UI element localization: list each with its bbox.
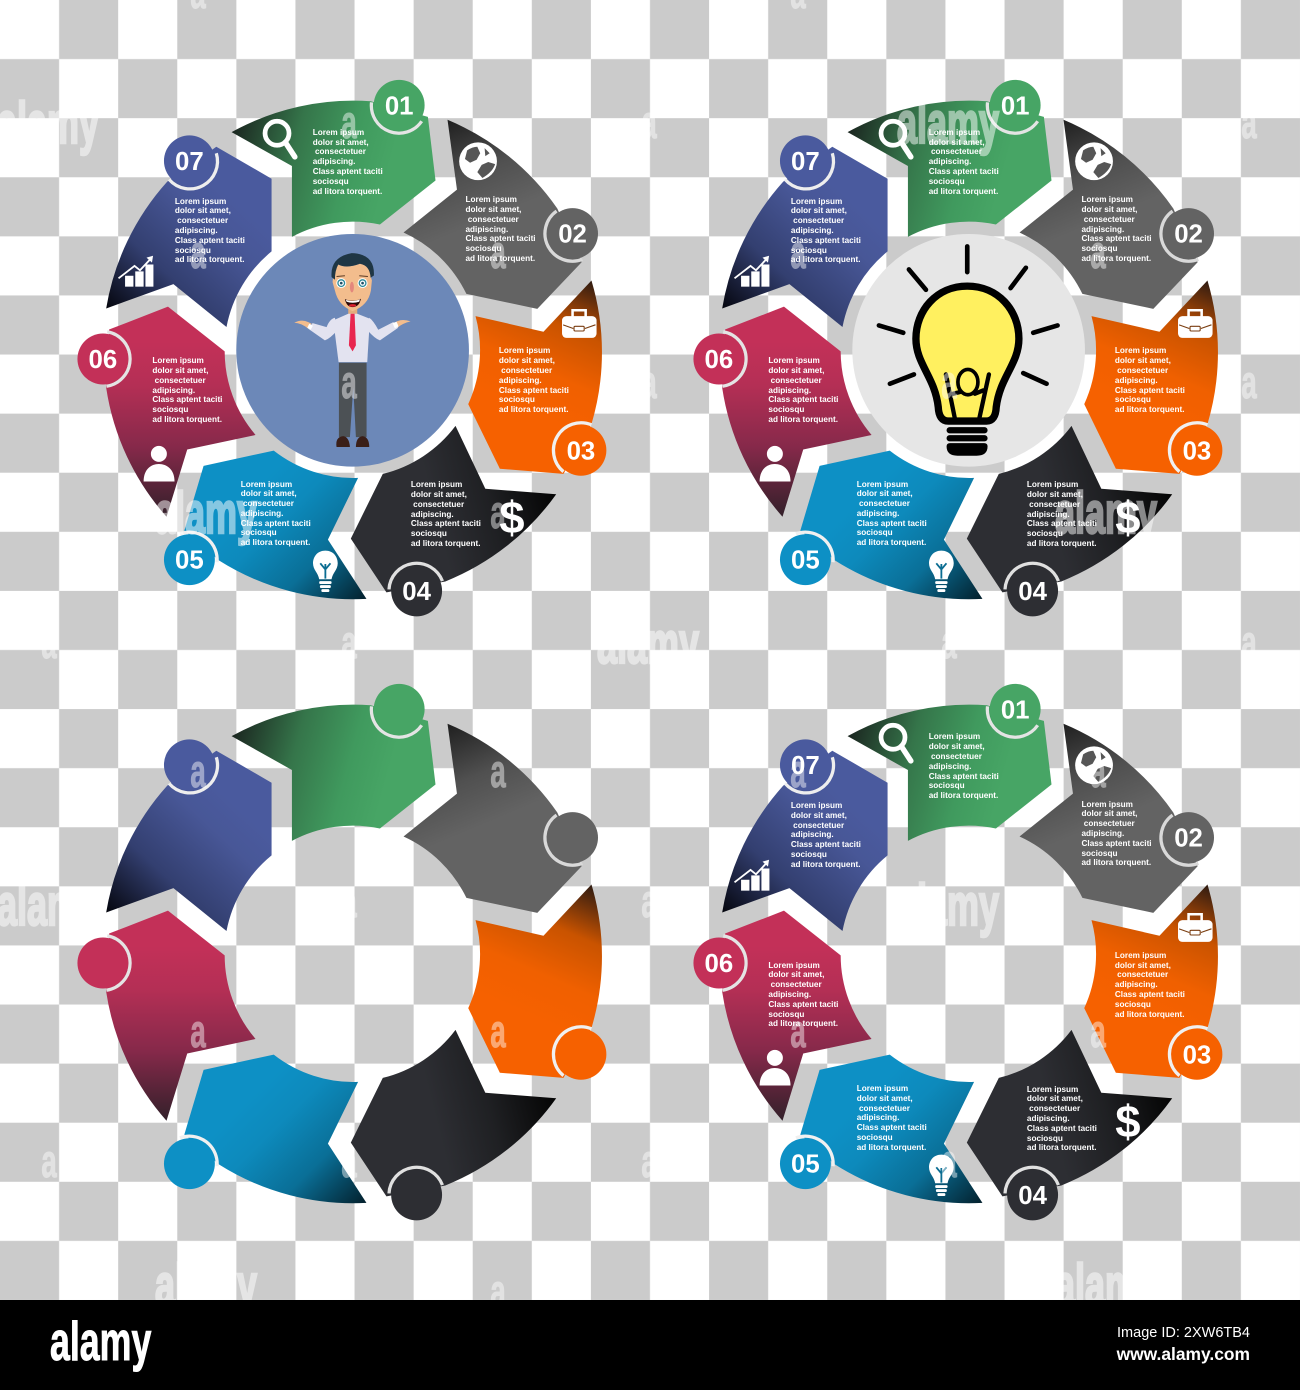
blank segment green (232, 684, 436, 841)
text block 05: sociosqu (241, 528, 277, 537)
text block 01: dolor sit amet, (313, 138, 369, 147)
text block 06: Lorem ipsum (768, 356, 820, 365)
text block 06: Class aptent taciti (152, 395, 222, 404)
text block 05: adipiscing. (857, 1113, 899, 1122)
segment 05 blue: 05 (175, 546, 204, 574)
segment 03 orange: 03 (1183, 437, 1211, 465)
text block 03: adipiscing. (499, 376, 542, 385)
watermark overlay: alamy (0, 91, 99, 156)
blank ring diagram (77, 684, 606, 1220)
segment 07 navy: 07 (791, 752, 820, 780)
text block 05: adipiscing. (857, 509, 899, 518)
segment 01 green (232, 79, 436, 236)
text block 03: dolor sit amet, (1115, 961, 1171, 970)
text block 02 (1082, 195, 1152, 263)
text block 07: Class aptent taciti (175, 236, 245, 245)
text block 06: sociosqu (768, 405, 804, 414)
text block 02: sociosqu (466, 244, 501, 253)
segment 03 orange (468, 280, 606, 475)
text block 02: Lorem ipsum (1082, 195, 1133, 204)
blank segment black (351, 1030, 556, 1220)
text block 01: Lorem ipsum (929, 128, 980, 137)
segment 03 orange (1084, 280, 1222, 475)
text block 07: ad litora torquent. (791, 255, 860, 264)
text block 06 (768, 961, 838, 1028)
text block 07: Lorem ipsum (791, 197, 842, 206)
segment 02 grey (1020, 724, 1214, 913)
text block 04 (411, 480, 481, 548)
text block 06: dolor sit amet, (152, 366, 208, 375)
text block 03: Lorem ipsum (1115, 346, 1166, 355)
watermark overlay: a (790, 228, 806, 279)
watermark overlay: a (1090, 1007, 1106, 1058)
text block 05: consectetuer (859, 1104, 910, 1113)
text block 03: sociosqu (1115, 1000, 1151, 1009)
text block 05: Class aptent taciti (857, 1123, 927, 1132)
text block 06: consectetuer (155, 376, 206, 385)
segment 05 blue: 05 (791, 1151, 820, 1179)
text block 01: Lorem ipsum (929, 732, 980, 741)
panel: blank cycle without text (77, 684, 606, 1220)
segment 02 grey: 02 (1174, 220, 1203, 248)
text block 02: adipiscing. (466, 225, 508, 234)
text block 07: Lorem ipsum (175, 197, 226, 206)
text block 06: ad litora torquent. (152, 415, 222, 424)
text block 02: ad litora torquent. (1082, 858, 1151, 867)
segment 07 navy (106, 135, 272, 327)
text block 04: sociosqu (1027, 529, 1063, 538)
blank segment grey (404, 724, 598, 913)
text block 07: consectetuer (793, 216, 844, 225)
watermark overlay: a (941, 618, 957, 669)
text block 03: consectetuer (1117, 366, 1168, 375)
watermark overlay: a (341, 877, 357, 928)
watermark overlay: a (341, 358, 357, 409)
segment 01 green (848, 684, 1052, 841)
text block 03 (1115, 346, 1185, 414)
watermark overlay: a (41, 358, 57, 409)
watermark overlay: alamy (0, 873, 99, 938)
text block 06: adipiscing. (768, 386, 811, 395)
text block 04: consectetuer (1029, 500, 1080, 509)
segment 06 crimson: 06 (705, 950, 733, 978)
text block 04: Class aptent taciti (411, 519, 481, 528)
text block 01: dolor sit amet, (929, 742, 985, 751)
text block 04: ad litora torquent. (1027, 539, 1096, 548)
watermark overlay: alamy (155, 481, 257, 546)
text block 05: dolor sit amet, (857, 489, 913, 498)
text block 06: Lorem ipsum (768, 961, 820, 970)
text block 07: consectetuer (793, 821, 844, 830)
text block 06 (152, 356, 222, 424)
watermark overlay: a (1241, 98, 1257, 149)
text block 05: Class aptent taciti (241, 519, 311, 528)
watermark overlay: a (490, 747, 506, 798)
text block 07: sociosqu (791, 850, 827, 859)
text block 04: consectetuer (1029, 1104, 1080, 1113)
text block 06: sociosqu (152, 405, 188, 414)
text block 04 (1027, 1085, 1097, 1152)
text block 03: ad litora torquent. (1115, 1010, 1184, 1019)
text block 04: adipiscing. (1027, 510, 1070, 519)
text block 02: consectetuer (1084, 819, 1135, 828)
segment 02 grey (404, 119, 598, 308)
text block 05: ad litora torquent. (241, 538, 310, 547)
text block 02: consectetuer (468, 215, 519, 224)
text block 04: adipiscing. (411, 510, 454, 519)
segment 01 green: 01 (1001, 92, 1030, 120)
watermark overlay: a (490, 488, 506, 539)
text block 07: ad litora torquent. (791, 860, 860, 869)
segment 05 blue (164, 450, 366, 599)
segment 03 orange: 03 (567, 437, 595, 465)
text block 03: ad litora torquent. (1115, 405, 1184, 414)
text block 02: Lorem ipsum (466, 195, 517, 204)
text block 02: ad litora torquent. (1082, 254, 1151, 263)
text block 05: sociosqu (857, 528, 893, 537)
text block 07: dolor sit amet, (791, 206, 847, 215)
text block 07 (791, 197, 861, 264)
ring diagram with empty centre (693, 684, 1222, 1220)
text block 06 (768, 356, 838, 424)
segment 06 crimson: 06 (705, 346, 733, 374)
text block 07: adipiscing. (791, 830, 834, 839)
segment 07 navy: 07 (791, 147, 820, 175)
text block 05: dolor sit amet, (857, 1094, 913, 1103)
text block 03: Class aptent taciti (1115, 990, 1185, 999)
watermark overlay: alamy (897, 873, 999, 938)
text block 07: Lorem ipsum (791, 801, 842, 810)
watermark overlay: a (1241, 877, 1257, 928)
text block 03: ad litora torquent. (499, 405, 568, 414)
text block 01: consectetuer (315, 147, 366, 156)
text block 01 (929, 732, 999, 800)
ring diagram with character (77, 80, 606, 616)
text block 02: sociosqu (1082, 849, 1117, 858)
text block 01: ad litora torquent. (929, 187, 998, 196)
text block 06: sociosqu (768, 1010, 804, 1019)
text block 03: sociosqu (499, 395, 535, 404)
text block 07: adipiscing. (175, 226, 218, 235)
text block 04: ad litora torquent. (1027, 1143, 1096, 1152)
text block 01: consectetuer (931, 752, 982, 761)
text block 03: dolor sit amet, (499, 356, 555, 365)
watermark overlay: a (190, 1007, 206, 1058)
segment 05 blue (780, 450, 982, 599)
text block 06: Class aptent taciti (768, 1000, 838, 1009)
text block 03: adipiscing. (1115, 376, 1158, 385)
watermark overlay: a (1241, 358, 1257, 409)
text block 02: dolor sit amet, (466, 205, 521, 214)
text block 01: Lorem ipsum (313, 128, 364, 137)
text block 06: Class aptent taciti (768, 395, 838, 404)
segment 06 crimson (693, 306, 872, 516)
text block 04: Lorem ipsum (411, 480, 462, 489)
text block 03: Class aptent taciti (1115, 386, 1185, 395)
text block 05: ad litora torquent. (857, 538, 926, 547)
text block 05: consectetuer (243, 499, 294, 508)
text block 05: adipiscing. (241, 509, 283, 518)
text block 01: adipiscing. (929, 157, 971, 166)
segment 02 grey: 02 (558, 220, 587, 248)
text block 04: Class aptent taciti (1027, 1124, 1097, 1133)
watermark overlay: a (490, 1007, 506, 1058)
text block 06: ad litora torquent. (768, 415, 838, 424)
segment 04 black (351, 425, 556, 616)
footer bar (0, 1300, 1300, 1390)
watermark overlay: a (190, 228, 206, 279)
text block 06: consectetuer (771, 376, 822, 385)
text block 06: dolor sit amet, (768, 366, 824, 375)
watermark overlay: a (641, 877, 657, 928)
segment 03 orange: 03 (1183, 1041, 1211, 1069)
watermark overlay: a (341, 618, 357, 669)
text block 04: Class aptent taciti (1027, 519, 1097, 528)
text block 04: dolor sit amet, (411, 490, 467, 499)
text block 07: Class aptent taciti (791, 236, 861, 245)
segment 02 grey: 02 (1174, 825, 1203, 853)
text block 01: adipiscing. (929, 762, 971, 771)
text block 01 (929, 128, 999, 196)
watermark overlay: a (41, 1137, 57, 1188)
panel: cycle with businessman centre (77, 80, 606, 616)
watermark overlay: a (190, 747, 206, 798)
blank segment blue (164, 1055, 366, 1203)
segment 01 green (848, 79, 1052, 236)
watermark overlay: a (490, 228, 506, 279)
segment 06 crimson (693, 911, 872, 1121)
blank segment navy (106, 739, 272, 931)
blank segment crimson (77, 911, 256, 1121)
text block 02: Class aptent taciti (466, 234, 536, 243)
watermark overlay: a (790, 747, 806, 798)
watermark overlay: a (41, 618, 57, 669)
watermark overlay: a (641, 98, 657, 149)
text block 07: consectetuer (177, 216, 228, 225)
text block 05: consectetuer (859, 499, 910, 508)
text block 05 (857, 480, 927, 547)
watermark overlay: alamy (1055, 481, 1157, 546)
text block 04: adipiscing. (1027, 1114, 1070, 1123)
text block 03: adipiscing. (1115, 980, 1158, 989)
segment 07 navy (722, 739, 888, 931)
text block 01: ad litora torquent. (313, 187, 382, 196)
text block 02 (466, 195, 536, 263)
segment 04 black (967, 425, 1172, 616)
segment 01 green: 01 (385, 92, 414, 120)
centre disc with businessman (236, 233, 469, 466)
text block 05 (857, 1084, 927, 1152)
text block 02: ad litora torquent. (466, 254, 535, 263)
text block 02: adipiscing. (1082, 225, 1124, 234)
segment 04 black: $ (499, 492, 524, 543)
text block 01: sociosqu (929, 781, 965, 790)
text block 05: Class aptent taciti (857, 519, 927, 528)
text block 02: Lorem ipsum (1082, 800, 1133, 809)
text block 02: dolor sit amet, (1082, 809, 1137, 818)
text block 03: sociosqu (1115, 395, 1151, 404)
watermark overlay: a (1090, 747, 1106, 798)
segment 01 green: 01 (1001, 696, 1030, 724)
text block 06: dolor sit amet, (768, 970, 824, 979)
footer logo: alamy (50, 1310, 152, 1372)
text block 07 (175, 197, 245, 264)
text block 03: consectetuer (501, 366, 552, 375)
text block 01: Class aptent taciti (313, 167, 383, 176)
text block 02: sociosqu (1082, 244, 1117, 253)
text block 05: Lorem ipsum (857, 480, 908, 488)
text block 07: sociosqu (791, 246, 827, 254)
blank segment orange (468, 884, 606, 1080)
segment 02 grey (1020, 119, 1214, 308)
segment 04 black: 04 (1018, 578, 1048, 606)
text block 02: consectetuer (1084, 215, 1135, 224)
text block 04: Lorem ipsum (1027, 1085, 1078, 1094)
segment 04 black (967, 1030, 1172, 1220)
text block 06: adipiscing. (768, 990, 811, 999)
text block 04: dolor sit amet, (1027, 1094, 1083, 1103)
text block 04: ad litora torquent. (411, 539, 480, 548)
panel: cycle with text and empty centre (693, 684, 1222, 1220)
text block 03 (499, 346, 569, 414)
text block 04: Lorem ipsum (1027, 480, 1078, 489)
watermark overlay: a (1241, 1137, 1257, 1188)
segment 04 black: 04 (1018, 1182, 1048, 1210)
text block 04: dolor sit amet, (1027, 490, 1083, 499)
ring diagram with bulb (693, 80, 1222, 616)
segment 07 navy: 07 (175, 147, 204, 175)
text block 03: Lorem ipsum (499, 346, 550, 355)
segment 06 crimson (77, 306, 256, 516)
text block 03: Lorem ipsum (1115, 951, 1166, 960)
text block 04: consectetuer (413, 500, 464, 509)
text block 04 (1027, 480, 1097, 548)
text block 07: sociosqu (175, 246, 211, 254)
watermark overlay: a (790, 1007, 806, 1058)
text block 01: ad litora torquent. (929, 791, 998, 800)
text block 02: dolor sit amet, (1082, 205, 1137, 214)
text block 05: sociosqu (857, 1133, 893, 1142)
panel: cycle with light bulb centre (693, 80, 1222, 616)
segment 04 black: $ (1115, 492, 1140, 543)
text block 01: consectetuer (931, 147, 982, 156)
text block 07: dolor sit amet, (791, 811, 847, 820)
segment 05 blue (780, 1055, 982, 1203)
text block 01: Class aptent taciti (929, 167, 999, 176)
text block 02: Class aptent taciti (1082, 839, 1152, 848)
text block 03: Class aptent taciti (499, 386, 569, 395)
text block 01: sociosqu (929, 177, 965, 186)
watermark overlay: a (641, 358, 657, 409)
text block 02: adipiscing. (1082, 829, 1124, 838)
text block 07: Class aptent taciti (791, 840, 861, 849)
text block 06: Lorem ipsum (152, 356, 204, 365)
watermark overlay: alamy (897, 91, 999, 156)
watermark overlay: alamy (597, 611, 699, 676)
text block 04: sociosqu (1027, 1134, 1063, 1143)
segment 06 crimson: 06 (89, 346, 117, 374)
text block 05: ad litora torquent. (857, 1143, 926, 1152)
segment 04 black: 04 (402, 578, 432, 606)
text block 05 (241, 480, 311, 547)
watermark overlay: a (641, 1137, 657, 1188)
watermark overlay: a (41, 488, 57, 539)
text block 07: ad litora torquent. (175, 255, 244, 264)
centre disc with light bulb (852, 233, 1085, 466)
text block 02 (1082, 800, 1152, 867)
website: www.alamy.com (1116, 1344, 1250, 1364)
text block 03: dolor sit amet, (1115, 356, 1171, 365)
segment 04 black: $ (1115, 1096, 1140, 1147)
image id: Image ID: 2XW6TB4 (1117, 1325, 1250, 1341)
segment 05 blue: 05 (791, 546, 820, 574)
text block 03 (1115, 951, 1185, 1019)
text block 05: dolor sit amet, (241, 489, 297, 498)
watermark overlay: a (1090, 228, 1106, 279)
text block 06: consectetuer (771, 980, 822, 989)
text block 06: ad litora torquent. (768, 1019, 838, 1028)
text block 02: Class aptent taciti (1082, 234, 1152, 243)
text block 01: adipiscing. (313, 157, 355, 166)
watermark overlay: a (1241, 618, 1257, 669)
text block 01: dolor sit amet, (929, 138, 985, 147)
watermark overlay: a (341, 98, 357, 149)
text block 05: Lorem ipsum (857, 1084, 908, 1093)
text block 07: dolor sit amet, (175, 206, 231, 215)
text block 03: consectetuer (1117, 970, 1168, 979)
text block 04: sociosqu (411, 529, 447, 538)
watermark overlay: a (941, 1137, 957, 1188)
text block 06: adipiscing. (152, 386, 195, 395)
segment 03 orange (1084, 884, 1222, 1080)
text block 07: adipiscing. (791, 226, 834, 235)
segment 07 navy (722, 135, 888, 327)
watermark overlay: a (341, 1137, 357, 1188)
text block 01: sociosqu (313, 177, 349, 186)
watermark overlay: a (941, 358, 957, 409)
text block 05: Lorem ipsum (241, 480, 292, 488)
text block 07 (791, 801, 861, 869)
text block 01 (313, 128, 383, 196)
text block 01: Class aptent taciti (929, 772, 999, 781)
